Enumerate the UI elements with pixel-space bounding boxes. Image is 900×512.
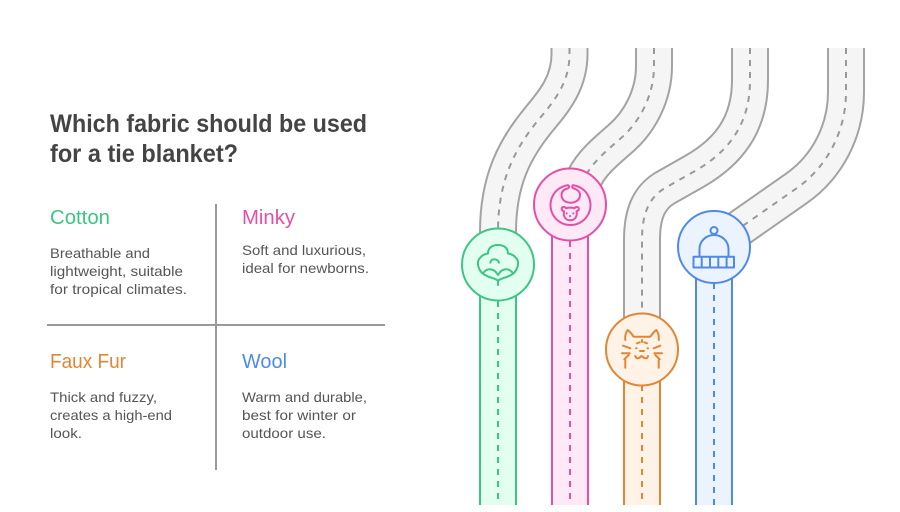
horizontal divider: [47, 324, 385, 326]
text block: cotton: lightweight, suitable: [50, 263, 183, 279]
colored lane: cotton: [480, 264, 516, 505]
text block: minky: Soft and luxurious,: [242, 242, 366, 258]
colored lane: faux fur: [624, 350, 660, 505]
icon: wool beanie: [678, 211, 750, 283]
text block: minky: ideal for newborns.: [242, 260, 369, 276]
text block: cotton: [50, 207, 187, 297]
text block: cotton: Cotton: [50, 207, 110, 229]
text block: wool: [242, 351, 367, 441]
text block: faux fur: [50, 351, 172, 441]
text block: minky: Minky: [242, 207, 295, 229]
icon: baby bib with bear: [534, 168, 606, 240]
text block: faux fur: creates a high-end: [50, 407, 172, 423]
text block: faux fur: Faux Fur: [50, 351, 126, 373]
colored lane: minky: [552, 204, 588, 505]
grey road: faux fur: [642, 48, 750, 350]
vertical divider: [215, 204, 217, 470]
title: [50, 110, 367, 168]
icon: cotton plant: [462, 228, 534, 300]
text block: minky: [242, 207, 369, 276]
text block: wool: Warm and durable,: [242, 389, 367, 405]
grey road: wool: [714, 48, 846, 246]
colored lane: wool: [696, 247, 732, 505]
text block: faux fur: look.: [50, 425, 82, 441]
title: Which fabric should be used: [50, 110, 367, 138]
grey road: minky: [575, 48, 654, 200]
text block: wool: Wool: [242, 351, 287, 373]
text block: wool: best for winter or: [242, 407, 356, 423]
icon: fluffy cat: [606, 314, 678, 386]
text block: wool: outdoor use.: [242, 425, 326, 441]
text block: cotton: for tropical climates.: [50, 281, 187, 297]
text block: faux fur: Thick and fuzzy,: [50, 389, 157, 405]
grey road: cotton: [498, 48, 570, 262]
text block: cotton: Breathable and: [50, 245, 150, 261]
title: for a tie blanket?: [50, 140, 238, 168]
